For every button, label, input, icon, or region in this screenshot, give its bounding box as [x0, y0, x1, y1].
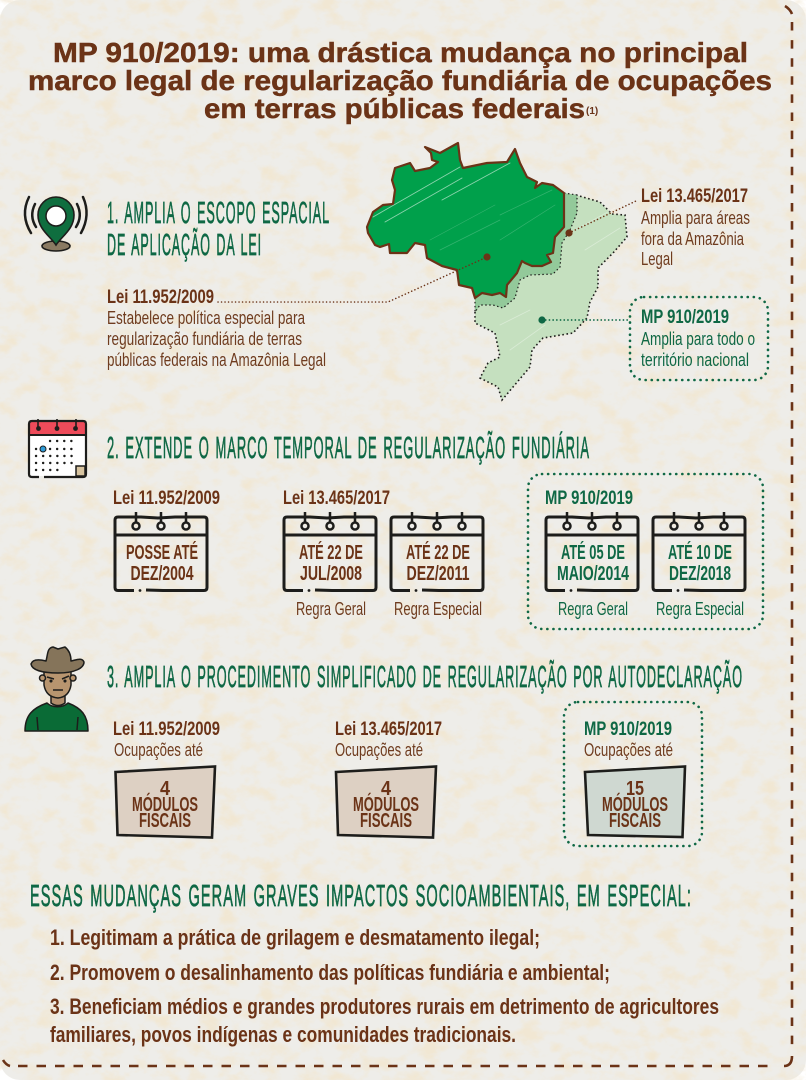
callout: MP 910/2019 deadlines: ATÉ 10 DE: [668, 541, 732, 564]
map marker: national: [538, 316, 546, 324]
list: impacts: [50, 925, 719, 1047]
group: Lei 13.465/2017 modules: FISCAIS: [360, 810, 412, 832]
map hatching: [373, 163, 620, 350]
callout: MP 910/2019 modules: MÓDULOS: [602, 792, 668, 816]
group: Lei 11.952/2009 deadline: [113, 488, 220, 592]
list: impacts: 2. Promovem o desalinhamento das políticas fundiária e ambiental;: [50, 960, 610, 985]
callout: MP 910/2019 modules: [564, 702, 702, 846]
text: Lei 11.952/2009 scope: regularização fundiária de terras: [107, 328, 302, 349]
group: Lei 11.952/2009 deadline: Lei 11.952/2009: [113, 488, 220, 509]
callout: MP 910/2019 scope: território nacional: [641, 349, 749, 370]
group: Lei 13.465/2017 deadlines: DEZ/2011: [406, 562, 470, 585]
callout: MP 910/2019 deadlines: [528, 474, 763, 629]
title: em terras públicas federais: [204, 93, 585, 124]
text: Lei 11.952/2009 scope: Estabelece política especial para: [107, 307, 306, 328]
callout: MP 910/2019 scope: [630, 297, 768, 380]
text: Lei 11.952/2009 scope: Lei 11.952/2009: [107, 287, 214, 308]
group: Lei 13.465/2017 modules: Ocupações até: [335, 739, 423, 760]
group: Lei 11.952/2009 deadline: POSSE ATÉ: [126, 541, 198, 564]
callout: MP 910/2019 deadlines: Regra Geral: [558, 598, 628, 619]
text: Lei 11.952/2009 scope: [107, 287, 326, 370]
list: impacts: familiares, povos indígenas e comunidades tradicionais.: [50, 1022, 516, 1047]
group: Lei 11.952/2009 modules: Ocupações até: [114, 739, 203, 760]
group: Lei 13.465/2017 modules: 4: [381, 778, 392, 800]
group: Lei 13.465/2017 deadlines: ATÉ 22 DE: [299, 541, 363, 564]
heading: section 1: [107, 195, 330, 262]
text: Lei 13.465/2017 scope: Legal: [641, 248, 673, 269]
text: Lei 11.952/2009 scope: públicas federais na Amazônia Legal: [107, 349, 326, 370]
map region: Lei 13.465/2017 extension: [475, 193, 577, 312]
callout: MP 910/2019 modules: FISCAIS: [609, 810, 661, 832]
title: MP 910/2019: uma drástica mudança no principal: [53, 37, 748, 68]
callout: MP 910/2019 deadlines: DEZ/2018: [669, 562, 731, 585]
text: Lei 13.465/2017 scope: fora da Amazônia: [641, 228, 745, 249]
icon: calendar: [29, 419, 86, 477]
map marker: Amazon: [483, 253, 491, 261]
group: Lei 13.465/2017 deadlines: JUL/2008: [300, 562, 362, 585]
group: Lei 11.952/2009 modules: MÓDULOS: [132, 792, 198, 816]
text: 1. AMPLIA O ESCOPO ESPACIAL: [107, 195, 330, 230]
group: Lei 13.465/2017 modules: Lei 13.465/2017: [335, 719, 442, 740]
group: Lei 13.465/2017 modules: MÓDULOS: [353, 792, 419, 816]
leader lines: [218, 200, 638, 320]
map of Brazil: [367, 143, 627, 400]
group: Lei 11.952/2009 modules: Lei 11.952/2009: [113, 719, 220, 740]
group: Lei 13.465/2017 deadlines: [283, 488, 483, 619]
title: [28, 37, 772, 124]
group: Lei 11.952/2009 modules: 4: [160, 778, 171, 800]
text: Lei 13.465/2017 scope: [641, 186, 750, 269]
map region: whole national territory: [475, 195, 627, 400]
group: Lei 11.952/2009 modules: FISCAIS: [139, 810, 191, 832]
group: Lei 13.465/2017 deadlines: ATÉ 22 DE: [406, 541, 470, 564]
group: Lei 11.952/2009 deadline: DEZ/2004: [130, 562, 194, 585]
callout: MP 910/2019 deadlines: MP 910/2019: [545, 488, 633, 509]
callout: MP 910/2019 modules: MP 910/2019: [584, 719, 672, 740]
map marker: extension: [565, 229, 573, 237]
group: Lei 13.465/2017 deadlines: Lei 13.465/2017: [283, 488, 390, 509]
list: impacts: 1. Legitimam a prática de grilagem e desmatamento ilegal;: [50, 925, 540, 950]
heading: section 1: DE APLICAÇÃO DA LEI: [107, 227, 262, 262]
icon: location pin: [25, 197, 87, 251]
callout: MP 910/2019 deadlines: Regra Especial: [656, 598, 744, 619]
map region: Legal Amazon: [367, 143, 564, 298]
group: Lei 13.465/2017 modules: [335, 719, 442, 838]
title: (1): [586, 106, 598, 117]
callout: MP 910/2019 modules: Ocupações até: [584, 739, 673, 760]
callout: MP 910/2019 deadlines: ATÉ 05 DE: [561, 541, 625, 564]
text: Lei 13.465/2017 scope: Amplia para áreas: [641, 207, 750, 228]
group: Lei 13.465/2017 deadlines: Regra Especial: [394, 598, 482, 619]
title: marco legal de regularização fundiária de ocupações: [28, 65, 772, 96]
callout: MP 910/2019 deadlines: MAIO/2014: [557, 562, 629, 585]
text: Lei 13.465/2017 scope: Lei 13.465/2017: [641, 186, 748, 207]
group: Lei 11.952/2009 modules: [113, 719, 220, 838]
callout: MP 910/2019 modules: 15: [626, 778, 644, 800]
icon: farmer: [25, 647, 88, 731]
group: Lei 13.465/2017 deadlines: Regra Geral: [296, 598, 366, 619]
callout: MP 910/2019 scope: Amplia para todo o: [641, 328, 755, 349]
callout: MP 910/2019 scope: MP 910/2019: [641, 307, 729, 328]
